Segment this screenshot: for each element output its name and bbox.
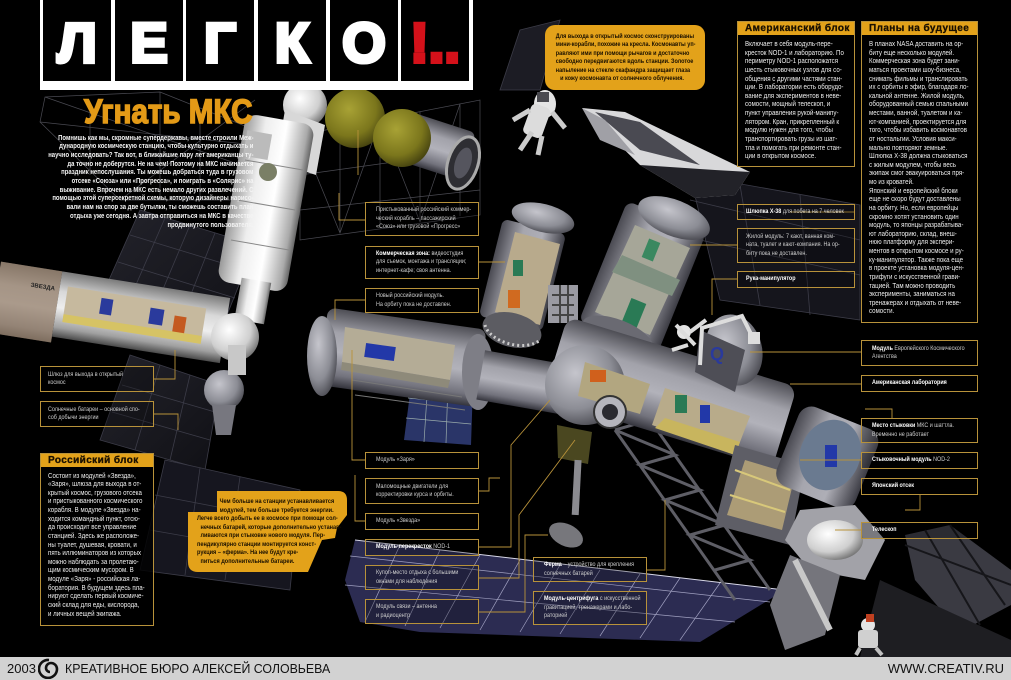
label: American lab: Американская лаборатория xyxy=(872,379,947,386)
label: airlock: Шлюз для выхода в открытый космос xyxy=(48,370,123,386)
label: docking site xyxy=(861,418,978,443)
label: solar batteries: Солнечные батареи – основной спо- соб добычи энергии xyxy=(48,406,140,421)
label: commercial zone xyxy=(365,246,479,279)
icon: spiral logo xyxy=(38,658,58,679)
heading: American block: Американский блок xyxy=(745,23,850,34)
callout: solar power text: пендикулярно станции монтируется конст- xyxy=(197,541,316,548)
label: Zvezda: Модуль «Звезда» xyxy=(376,517,420,524)
American block text: Включает в себя модуль-пере- кресток NOD-1 и лабораторию. По периметру NOD-1 расположатся шесть стыковочных узлов для со- общения с другими частями стан- ции. В лаборатории есть оборудо- вание для экспериментов в неве- сомости, мощный телескоп, и пункт управления рукой-манипу- лятором. Кран, прикрепленный к модулю нужен для того, чтобы транспортировать грузы из шат- тла и помогать при ремонте стан- ции в открытом космосе. xyxy=(745,41,844,160)
label: thrusters xyxy=(365,478,479,504)
callout: jet chairs xyxy=(545,25,705,90)
label: cupola: Купол-место отдыха с большими окнами для наблюдения xyxy=(376,569,458,584)
panel: American block xyxy=(737,21,855,167)
label: truss: Ферма – устройство для крепления солнечных батарей xyxy=(544,561,634,576)
glass habitat cylinder xyxy=(577,187,716,365)
label: comms module: Модуль связи – антенна и радиоцентр xyxy=(376,603,437,618)
label: centrifuge xyxy=(533,591,647,625)
astronaut in jet chair xyxy=(513,90,565,155)
title: Угнать МКС xyxy=(84,93,252,131)
label: ESA module xyxy=(861,340,978,366)
heading: future plans: Планы на будущее xyxy=(869,23,969,34)
label: NOD-2 xyxy=(861,452,978,469)
label: robot arm xyxy=(737,271,855,288)
bottom solar array xyxy=(345,540,785,642)
label: ESA module: Модуль Европейского Космического Агентства xyxy=(872,344,965,360)
main node and American laboratory xyxy=(476,317,797,468)
label: X-38 xyxy=(737,204,855,220)
label: NOD-1 xyxy=(365,539,479,556)
European module and manipulator: Q xyxy=(710,344,724,364)
callout text: Для выхода в открытый космос сконструированы мини-корабли, похожие на кресла. Космонавты уп- равляют ими при помощи рычагов и достаточно свободно передвигаются вдоль станции. Золотое напыление на стекле скафандра защищает глаза и кожу космонавта от солнечного облучения. xyxy=(556,32,695,82)
Russian block text: Состоит из модулей «Звезда», «Заря», шлюза для выхода в от- крытый космос, грузового отсека и пристыкованного космического корабля. В модуле «Звезда» на- ходится командный пункт, отсю- да происходит все управление станцией. Здесь же расположе- ны туалет, душевая, кровати, и пять иллюминаторов из которых можно наблюдать за пролетаю- щим космическим мусором. В модуле «Заря» - российская ла- боратория. В будущем здесь пла- нируют сделать первый космиче- ский склад для еды, кислорода, и личных вещей экипажа. xyxy=(48,472,145,618)
callout: solar power text: питься дополнительные батареи. xyxy=(200,558,294,565)
letter cell Г xyxy=(186,0,254,81)
label: commercial zone: Коммерческая зона: видеостудия для съемок, монтажа и трансляции; интернет-кафе; своя антенна. xyxy=(376,250,466,274)
letter cell Г: Г xyxy=(204,11,236,74)
letter cell Е xyxy=(115,0,183,81)
callout: solar power text: рукция – «ферма». На нее будут кре- xyxy=(197,549,298,556)
Zvezda module: ЗВЕЗДА xyxy=(30,283,56,293)
label: docking site: Место стыковки МКС и шаттла. Временно не работает xyxy=(872,422,954,438)
label: cupola xyxy=(365,565,479,590)
callout: solar power text: Легче всего добыть ее в космосе при помощи сол- xyxy=(197,515,338,522)
label: Soyuz xyxy=(365,202,479,236)
dish antenna xyxy=(545,425,592,553)
leader lines xyxy=(153,130,920,612)
label: NOD-1: Модуль-перекресток NOD-1 xyxy=(376,543,450,550)
Zvezda module xyxy=(0,262,230,369)
label: NOD-2: Стыковочный модуль NOD-2 xyxy=(872,456,950,463)
label: airlock xyxy=(40,366,154,392)
letter cell О xyxy=(330,0,398,81)
upper-left habitat module xyxy=(479,197,578,354)
future plans text: В планах NASA доставить на ор- биту еще несколько модулей. Коммерческая зона будет зани- маться проектами шоу-бизнеса, снимать фильмы и транслировать их с орбиты в эфир, благодаря ло- кальной антенне. Жилой модуль, оборудованный семью спальными местами, ванной, туалетом и ка- ют-компанией, проектируется для того, чтобы избавить космонавтов от ностальгии. Условия макси- мально повторяют земные. Шлюпка Х-38 должна стыковаться с жилым модулем, чтобы весь экипаж смог эвакуироваться пря- мо из кроватей. Японский и европейский блоки еще не скоро будут доставлены на орбиту. Но, если европейцы скромно хотят установить один модуль, то японцы разрабатыва- ют лабораторию, склад, внеш- нюю платформу для экспери- ментов в открытом космосе и ру- ку-манипулятор. Также пока еще в проекте установка модуля-цен- трифуги с искусственной грави- тацией. Там можно проводить эксперименты, заниматься на тренажерах и отдыхать от неве- сомости. xyxy=(869,41,969,315)
label: living module xyxy=(737,228,855,263)
label: robot arm: Рука-манипулятор xyxy=(746,275,796,282)
label: new Russian module xyxy=(365,288,479,313)
label: new Russian module: Новый российский модуль. На орбиту пока не доставлен. xyxy=(376,292,451,308)
label: comms module xyxy=(365,599,479,624)
label: telescope xyxy=(861,522,978,539)
callout: solar power text: модулей, тем больше требуется энергии. xyxy=(220,507,334,514)
white Russian module with sphere xyxy=(217,83,327,324)
letter cell Е: Е xyxy=(130,11,168,74)
label: truss xyxy=(533,557,647,582)
letter cell red exclamation xyxy=(401,0,469,81)
blue solar panel xyxy=(404,378,473,445)
intro text: Помнишь как мы, скромные супердержавы, вместе строили Меж- дународную космическую станцию, чтобы культурно отдыхать и научно исследовать? Так вот, в ближайшие пару лет американцы ту- да точно не доберутся. Не на чем! Поэтому на МКС начинается праздник непослушания. Ты можешь добраться туда в грузовом отсеке «Союза» или «Прогресса», и поиграть в «Солярис» на выживание. Впрочем на МКС есть немало других развлечений. С помощью этой суперсекретной схемы, которую дизайнеры нарисо- вали нам на спор за две бутылки, ты сможешь составить план отдыха уже сегодня. А завтра отправиться на МКС в качестве продвинутого пользователя. xyxy=(48,134,253,229)
heading: Russian block xyxy=(41,454,153,467)
astronaut bottom right xyxy=(856,614,882,655)
Zarya hub and docking module xyxy=(204,313,259,435)
astronaut near manipulator xyxy=(672,320,706,350)
label: Zarya xyxy=(365,452,479,469)
European module and manipulator xyxy=(695,308,770,392)
footer bar xyxy=(0,657,1011,680)
callout: solar power text: Чем больше на станции устанавливается xyxy=(220,498,334,505)
footer studio name: КРЕАТИВНОЕ БЮРО АЛЕКСЕЙ СОЛОВЬЕВА xyxy=(65,661,330,676)
X-38 shuttle xyxy=(582,108,750,198)
letter cell Л xyxy=(43,0,111,81)
central module with cutaway xyxy=(307,308,494,410)
label: telescope: Телескоп xyxy=(872,526,896,533)
Japanese module and telescope xyxy=(715,402,885,650)
label: thrusters: Маломощные двигатели для корректировки курса и орбиты. xyxy=(376,482,454,498)
label: Zvezda xyxy=(365,513,479,530)
callout: solar power text: ливаются при стыковке нового модуля. Пер- xyxy=(200,532,325,539)
label: Japanese compartment: Японский отсек xyxy=(872,482,914,489)
panel: Russian block xyxy=(40,453,154,626)
footer url: WWW.CREATIV.RU xyxy=(888,661,1004,676)
label: Japanese compartment xyxy=(861,478,978,495)
background: wire truss xyxy=(40,92,480,240)
callout: solar power text: нечных батарей, которые дополнительно устанав- xyxy=(200,524,341,531)
label: American lab xyxy=(861,375,978,392)
callout: solar power text xyxy=(197,498,341,565)
dark solar wing right xyxy=(860,525,1011,657)
label: living module: Жилой модуль: 7 кают, ванная ком- ната, туалет и кают-компания. На ор- биту пока не доставлен. xyxy=(746,233,840,257)
heading: Russian block: Российский блок xyxy=(48,455,139,466)
truss frame xyxy=(615,420,770,600)
label: Zarya: Модуль «Заря» xyxy=(376,456,415,463)
letter cell К xyxy=(258,0,326,81)
footer year: 2003 xyxy=(7,661,36,676)
header frame xyxy=(40,0,473,90)
letter cell Л: Л xyxy=(57,11,97,74)
label: X-38: Шлюпка Х-38 для побега на 7 человек xyxy=(746,208,844,215)
callout: solar power xyxy=(188,491,347,572)
background: dark solar panels xyxy=(100,20,860,590)
letter cell red exclamation: !.. xyxy=(410,11,460,74)
letter cell О: О xyxy=(342,11,386,74)
panel: future plans xyxy=(861,21,978,323)
label: Soyuz: Пристыкованный российский коммер- ческий корабль – пассажирский «Союз» или грузовой «Прогресс» xyxy=(376,206,471,230)
olive Soyuz spacecraft xyxy=(325,88,486,193)
letter cell К: К xyxy=(275,11,309,74)
label: solar batteries xyxy=(40,401,154,427)
label: centrifuge: Модуль-центрифуга с искусственной гравитацией, тренажерами и лабо- раторией xyxy=(544,595,641,619)
